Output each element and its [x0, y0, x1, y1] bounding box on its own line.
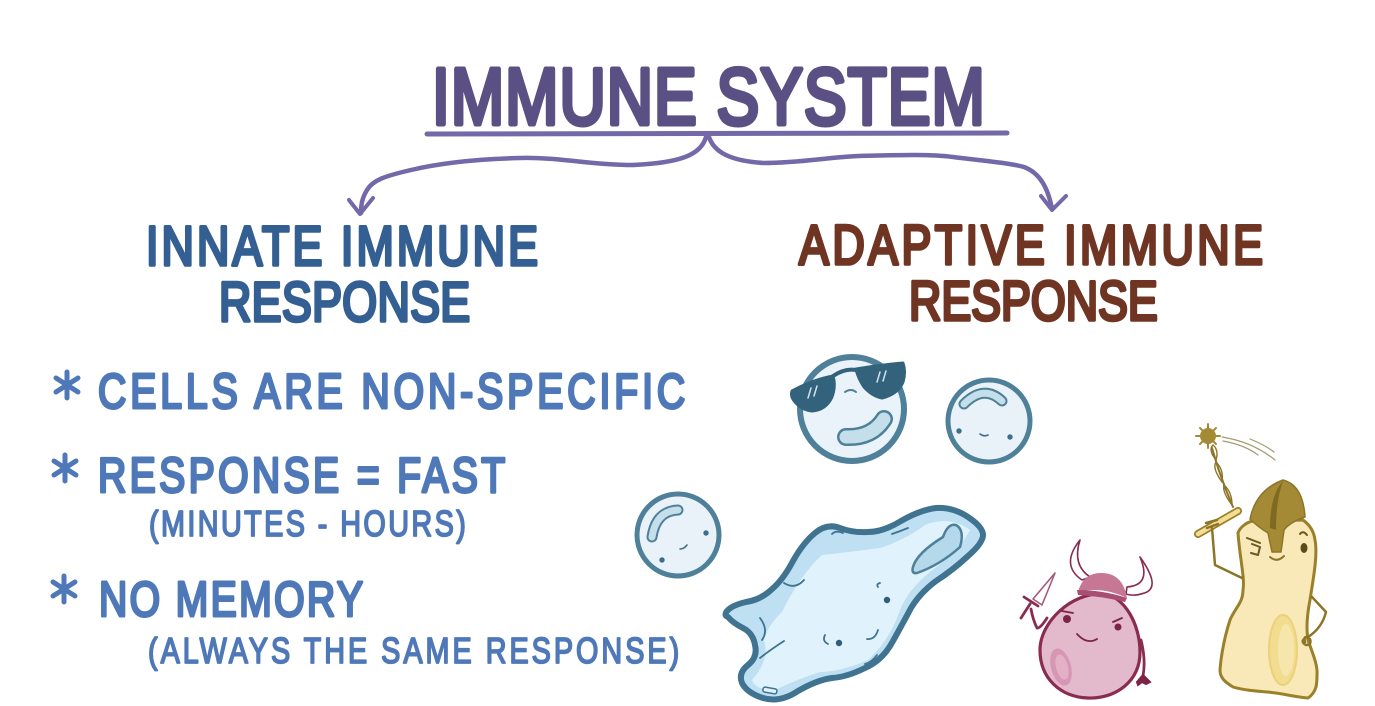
heading: innate immune response: RESPONSE: [219, 270, 470, 333]
bullet 2: (MINUTES - HOURS): [149, 503, 466, 544]
bullet 2: [54, 449, 505, 544]
heading: adaptive immune response: RESPONSE: [909, 269, 1158, 332]
icon: cool cell with sunglasses: [791, 357, 904, 461]
bullet 2: RESPONSE = FAST: [98, 449, 505, 503]
icon: macrophage cell: [726, 508, 983, 699]
bullet 3: [53, 573, 679, 671]
icon: yellow cell with mace: [1196, 424, 1326, 698]
heading: adaptive immune response: ADAPTIVE IMMUNE: [799, 213, 1263, 276]
icon: small cell right: [948, 380, 1030, 462]
icon: small cell left: [637, 494, 719, 576]
bullet 3: (ALWAYS THE SAME RESPONSE): [148, 630, 679, 671]
heading: innate immune response: [146, 214, 538, 333]
title: IMMUNE SYSTEM: [432, 52, 985, 142]
heading: adaptive immune response: [799, 213, 1263, 332]
bullet 1: CELLS ARE NON-SPECIFIC: [98, 365, 685, 419]
heading: innate immune response: INNATE IMMUNE: [146, 214, 538, 277]
icon: pink viking cell: [1021, 540, 1152, 698]
title underline and branching arrows: [349, 133, 1066, 214]
bullet list: innate response traits: [53, 365, 685, 671]
bullet 3: NO MEMORY: [99, 573, 363, 627]
